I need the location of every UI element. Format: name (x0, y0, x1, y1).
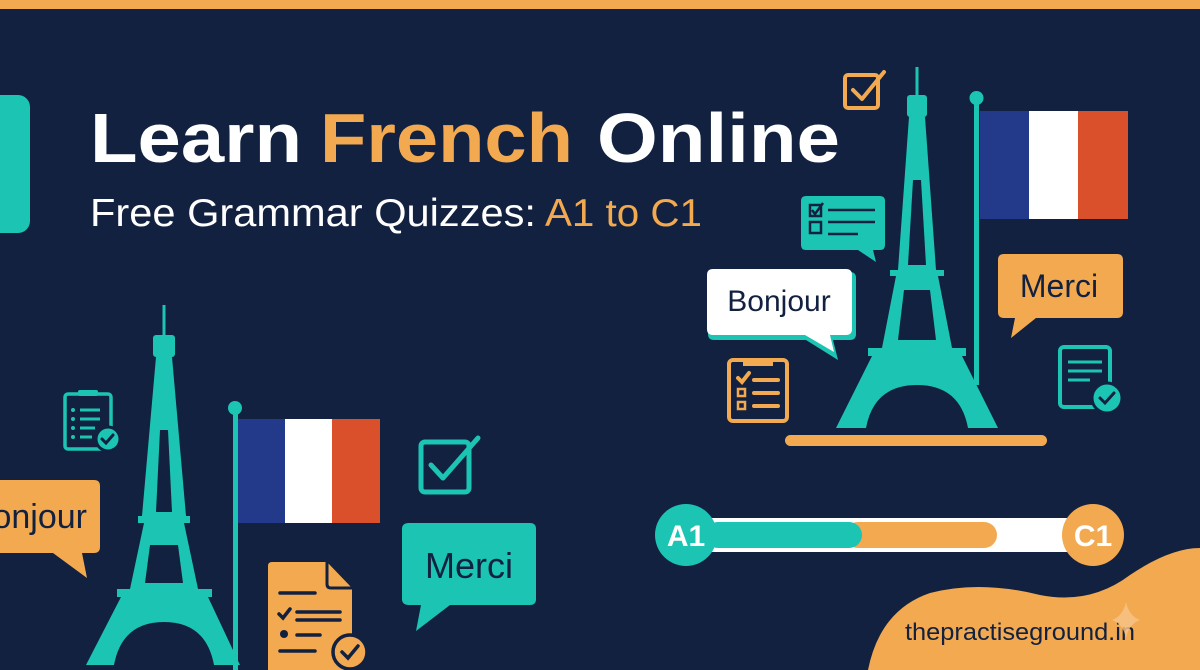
callout: Merci orange bubble: Merci (1020, 268, 1098, 304)
subtitle: A1 to C1 (545, 192, 702, 235)
callout: Bonjour white bubble: Bonjour (727, 285, 831, 318)
flag left (228, 401, 380, 670)
title: French (320, 99, 573, 177)
tower left cutouts (145, 430, 183, 583)
icon: teal checkbox (421, 438, 478, 492)
icon: orange quiz document (268, 562, 367, 670)
title: Online (597, 99, 840, 177)
title: Learn (90, 99, 302, 177)
eiffel tower left (86, 305, 240, 665)
progress bar A1 to C1: A1 (667, 520, 705, 553)
progress bar A1 to C1: C1 (1074, 520, 1112, 553)
callout: Bonjour orange bubble (cropped) (0, 480, 100, 578)
flag right (970, 91, 1128, 385)
title (90, 99, 840, 177)
subtitle (90, 192, 702, 235)
tower inner cutouts (898, 180, 936, 340)
left bottom illustration (0, 305, 536, 670)
icon: teal document with check (1060, 347, 1122, 413)
eiffel tower right (836, 67, 998, 428)
icon: teal clipboard with check (65, 390, 120, 451)
right illustration (707, 67, 1128, 446)
icon: orange checkbox (845, 72, 884, 108)
orange platform bar (785, 435, 1047, 446)
callout: Merci orange bubble (998, 254, 1123, 338)
footer url: thepractiseground.in (905, 619, 1135, 646)
icon: teal checklist bubble (801, 196, 885, 262)
orange blob footer (868, 548, 1200, 670)
icon: sparkle (1112, 602, 1140, 638)
callout: Bonjour white bubble (707, 269, 856, 360)
callout: Merci teal bubble (402, 523, 536, 631)
callout: Merci teal bubble: Merci (425, 545, 513, 586)
top accent bar (0, 0, 1200, 9)
icon: orange clipboard (729, 360, 787, 421)
subtitle: Free Grammar Quizzes: (90, 192, 536, 235)
progress bar A1 to C1 (655, 504, 1124, 566)
teal side tab (0, 95, 30, 233)
